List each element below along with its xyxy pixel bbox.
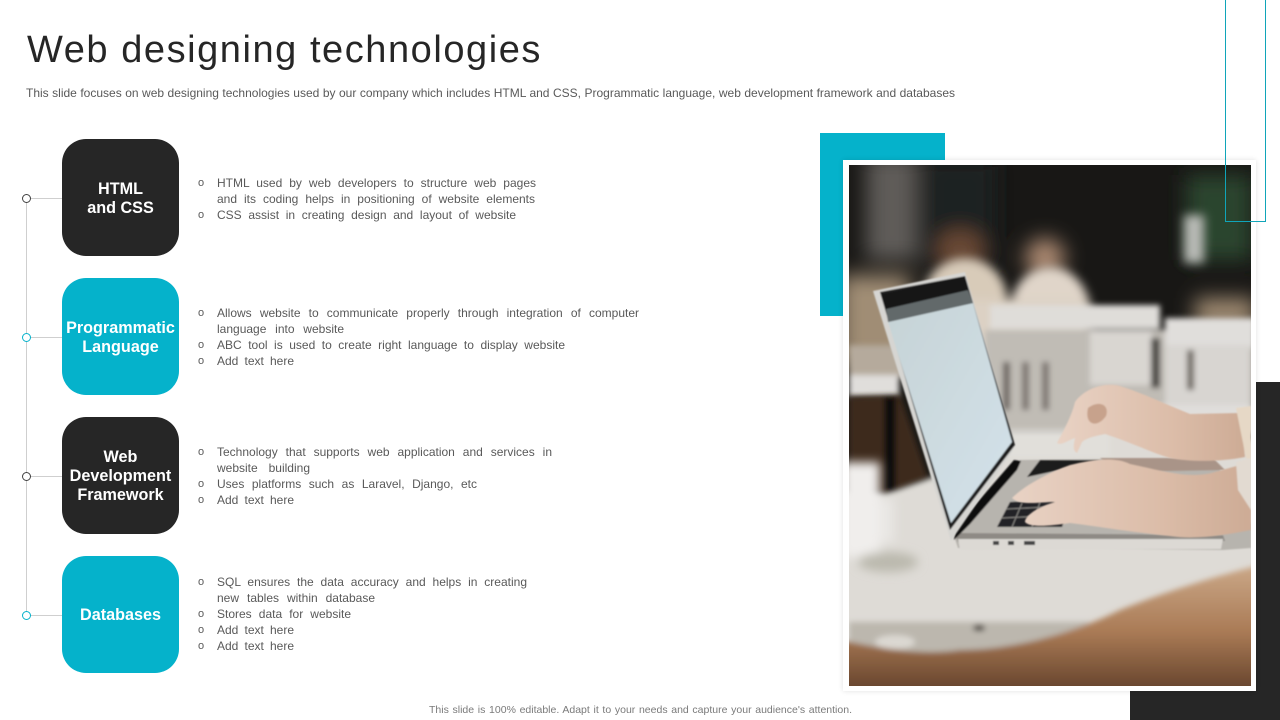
text block: HTML and CSS: and its coding helps in positioning of website elements bbox=[217, 192, 535, 206]
text block: Programmatic Language: o bbox=[198, 355, 204, 367]
text block: Web Development Framework: website building bbox=[217, 461, 310, 475]
title: Web designing technologies bbox=[27, 29, 542, 71]
table surface bbox=[840, 420, 1260, 650]
text block: Programmatic Language: o bbox=[198, 339, 204, 351]
label box: Databases bbox=[62, 556, 179, 673]
text block: HTML and CSS: o bbox=[198, 209, 204, 221]
text block: Programmatic Language: Allows website to communicate properly through integration of computer bbox=[217, 306, 639, 320]
hinge bbox=[954, 460, 1021, 540]
laptop base bbox=[953, 458, 1251, 550]
upper hand bbox=[1057, 385, 1251, 461]
laptop screen bbox=[873, 272, 1015, 541]
text block: Programmatic Language: ABC tool is used to create right language to display website bbox=[217, 338, 565, 352]
text block: Databases: o bbox=[198, 640, 204, 652]
label box: HTML and CSS bbox=[62, 139, 179, 256]
decorative teal block bbox=[820, 133, 945, 316]
text block: HTML and CSS: o bbox=[198, 177, 204, 189]
row 1 connector and node bbox=[22, 194, 62, 203]
text block: Databases: SQL ensures the data accuracy and helps in creating bbox=[217, 575, 527, 589]
text block: Programmatic Language: o bbox=[198, 307, 204, 319]
decorative teal outline bbox=[1225, 0, 1266, 222]
timeline connector bbox=[26, 198, 27, 615]
text block: Databases: o bbox=[198, 608, 204, 620]
label box: Programmatic Language: Language bbox=[82, 338, 159, 356]
text block: Programmatic Language: language into website bbox=[217, 322, 344, 336]
subtitle: This slide focuses on web designing technologies used by our company which includes HTML and CSS, Programmatic language, web development framework and databases bbox=[26, 86, 955, 100]
label box: Web Development Framework: Framework bbox=[77, 486, 164, 504]
keyboard bbox=[997, 499, 1072, 527]
text block: Databases bbox=[198, 575, 527, 653]
background wall bbox=[849, 165, 1251, 686]
text block: Databases: new tables within database bbox=[217, 591, 375, 605]
text block: Web Development Framework bbox=[198, 445, 552, 507]
text block: Databases: Add text here bbox=[217, 639, 294, 653]
text block: Programmatic Language: Add text here bbox=[217, 354, 294, 368]
coffee cup bbox=[842, 462, 918, 572]
text block: HTML and CSS: HTML used by web developers to structure web pages bbox=[217, 176, 536, 190]
label box: Programmatic Language bbox=[62, 278, 179, 395]
text block: Web Development Framework: Technology that supports web application and services in bbox=[217, 445, 552, 459]
photo: hands typing on a laptop bbox=[849, 165, 1251, 686]
text block: Web Development Framework: o bbox=[198, 494, 204, 506]
label box: HTML and CSS: and CSS bbox=[87, 198, 154, 216]
text block: Web Development Framework: Uses platforms such as Laravel, Django, etc bbox=[217, 477, 477, 491]
text block: HTML and CSS bbox=[198, 176, 536, 222]
photo frame bbox=[843, 160, 1256, 691]
label box: Web Development Framework: Development bbox=[70, 467, 171, 485]
label box: Programmatic Language: Programmatic bbox=[66, 318, 175, 336]
text block: Programmatic Language bbox=[198, 306, 639, 368]
text block: Web Development Framework: o bbox=[198, 478, 204, 490]
text block: Web Development Framework: Add text here bbox=[217, 493, 294, 507]
text block: HTML and CSS: CSS assist in creating design and layout of website bbox=[217, 208, 516, 222]
label box: Web Development Framework bbox=[62, 417, 179, 534]
row 2 connector and node bbox=[22, 333, 62, 342]
footer note: This slide is 100% editable. Adapt it to your needs and capture your audience's attention. bbox=[429, 704, 852, 716]
text block: Web Development Framework: o bbox=[198, 446, 204, 458]
label box: HTML and CSS: HTML bbox=[98, 180, 143, 198]
text block: Databases: Stores data for website bbox=[217, 607, 351, 621]
decorative dark block bbox=[1130, 382, 1280, 720]
text block: Databases: o bbox=[198, 576, 204, 588]
lower hand bbox=[1012, 458, 1251, 537]
label box: Databases: Databases bbox=[80, 606, 161, 624]
text block: Databases: o bbox=[198, 624, 204, 636]
chairs bbox=[849, 305, 1255, 435]
row 4 connector and node bbox=[22, 611, 62, 620]
dark area under the far table bbox=[849, 395, 928, 495]
foreground arm blur bbox=[840, 565, 1260, 700]
row 3 connector and node bbox=[22, 472, 62, 481]
label box: Web Development Framework: Web bbox=[104, 448, 137, 466]
text block: Databases: Add text here bbox=[217, 623, 294, 637]
